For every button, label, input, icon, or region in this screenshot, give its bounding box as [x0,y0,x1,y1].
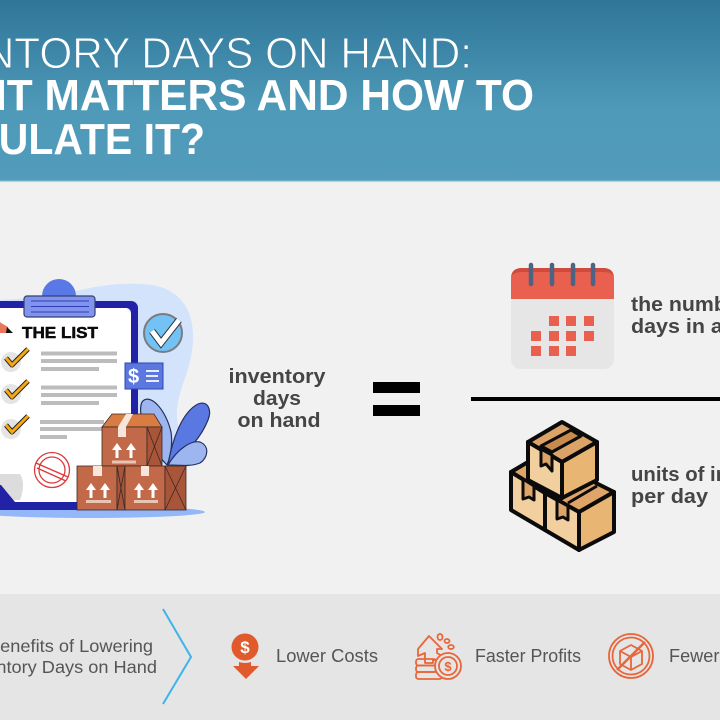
ground shadow [0,506,205,518]
icon: faster profits [416,634,461,679]
chevron arrow [163,609,191,704]
text placeholder lines [40,352,117,439]
icon: lower costs: $ [240,638,250,657]
stacked cartons [77,414,186,510]
clip [24,296,95,317]
lower left carton [77,466,125,510]
check marks [1,349,28,439]
benefits heading [0,636,157,677]
equals sign [373,382,420,416]
icon: faster profits: $ [444,659,452,674]
top box [528,422,597,498]
formula label: inventory days on hand: on hand [238,410,320,432]
fraction bar [471,397,720,401]
formula label: inventory days on hand: days [253,388,301,410]
label: faster profits: Faster Profits [475,646,581,666]
icon: stacked boxes [511,422,614,550]
dollar tag [125,363,163,389]
clipboard board [0,301,138,510]
pencil [0,321,13,333]
icon: lower costs [232,634,259,679]
label: lower costs: Lower Costs [276,646,378,666]
formula label: inventory days on hand: inventory [228,366,326,388]
dollar tag: $ [128,366,139,388]
list heading: THE LIST [22,325,99,342]
left box [511,462,562,530]
icon: fewer stockouts [609,634,653,678]
clip dome [42,279,76,313]
figure at clipboard corner [0,474,23,502]
header band [0,0,720,182]
title [0,29,534,164]
lower right carton [125,466,186,510]
numerator text [631,294,720,338]
illustration: clipboard checklist with boxes [0,279,210,518]
formula label: inventory days on hand [228,366,326,432]
red stamp [34,452,70,488]
approved badge [144,314,182,352]
top carton [102,414,162,466]
paper sheet [0,308,131,502]
denominator text: per day [631,486,709,508]
benefits strip [0,594,720,720]
plant leaves [141,399,210,466]
right box [545,475,614,550]
backdrop blob [0,284,193,505]
icon: calendar [511,265,614,369]
denominator text [631,464,720,508]
